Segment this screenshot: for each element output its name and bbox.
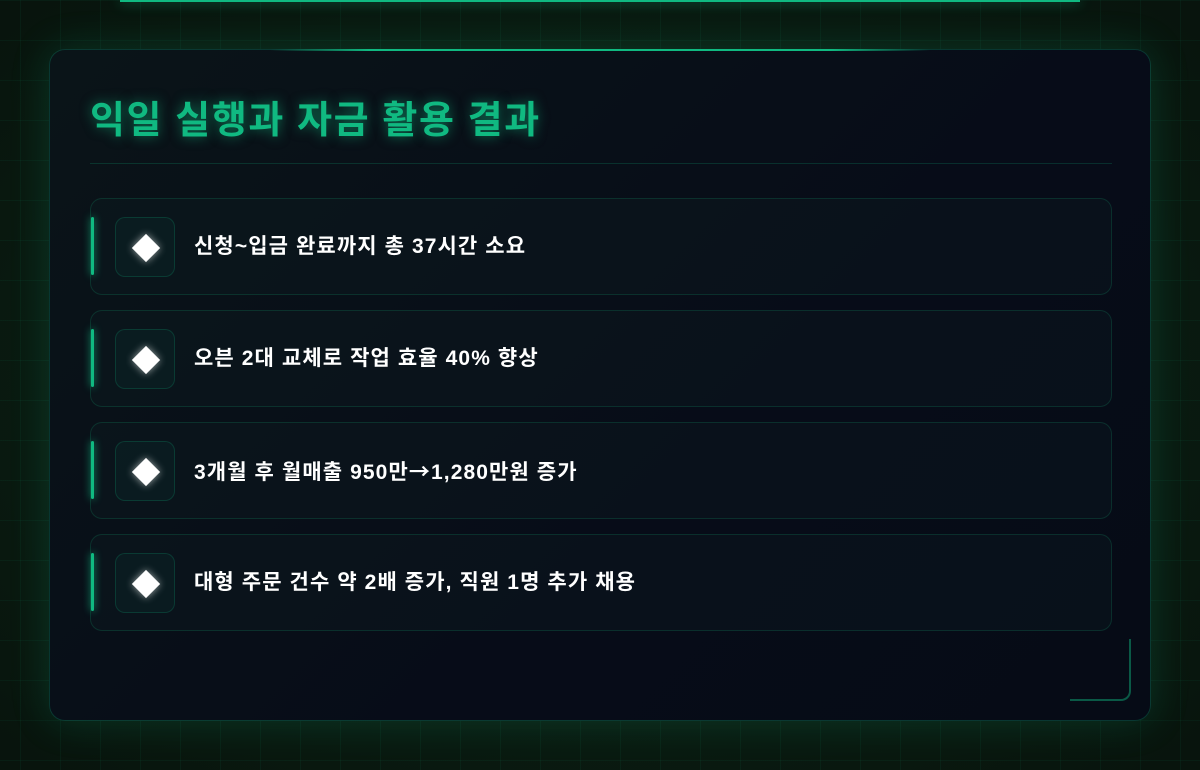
item 4 [90,534,1112,631]
text 2: 오븐 2대 교체로 작업 효율 40% 향상 [194,347,539,370]
icon: diamond [115,217,175,277]
text 3: 3개월 후 월매출 950만→1,280만원 증가 [194,456,578,486]
item 3 [90,422,1112,519]
text 4: 대형 주문 건수 약 2배 증가, 직원 1명 추가 채용 [194,571,636,594]
icon: diamond [115,441,175,501]
title: 익일 실행과 자금 활용 결과 [90,100,541,142]
item 1 [90,198,1112,295]
item 2 [90,310,1112,407]
icon: diamond [115,329,175,389]
corner bracket [1070,639,1131,701]
text 1: 신청~입금 완료까지 총 37시간 소요 [194,235,526,258]
icon: diamond [115,553,175,613]
